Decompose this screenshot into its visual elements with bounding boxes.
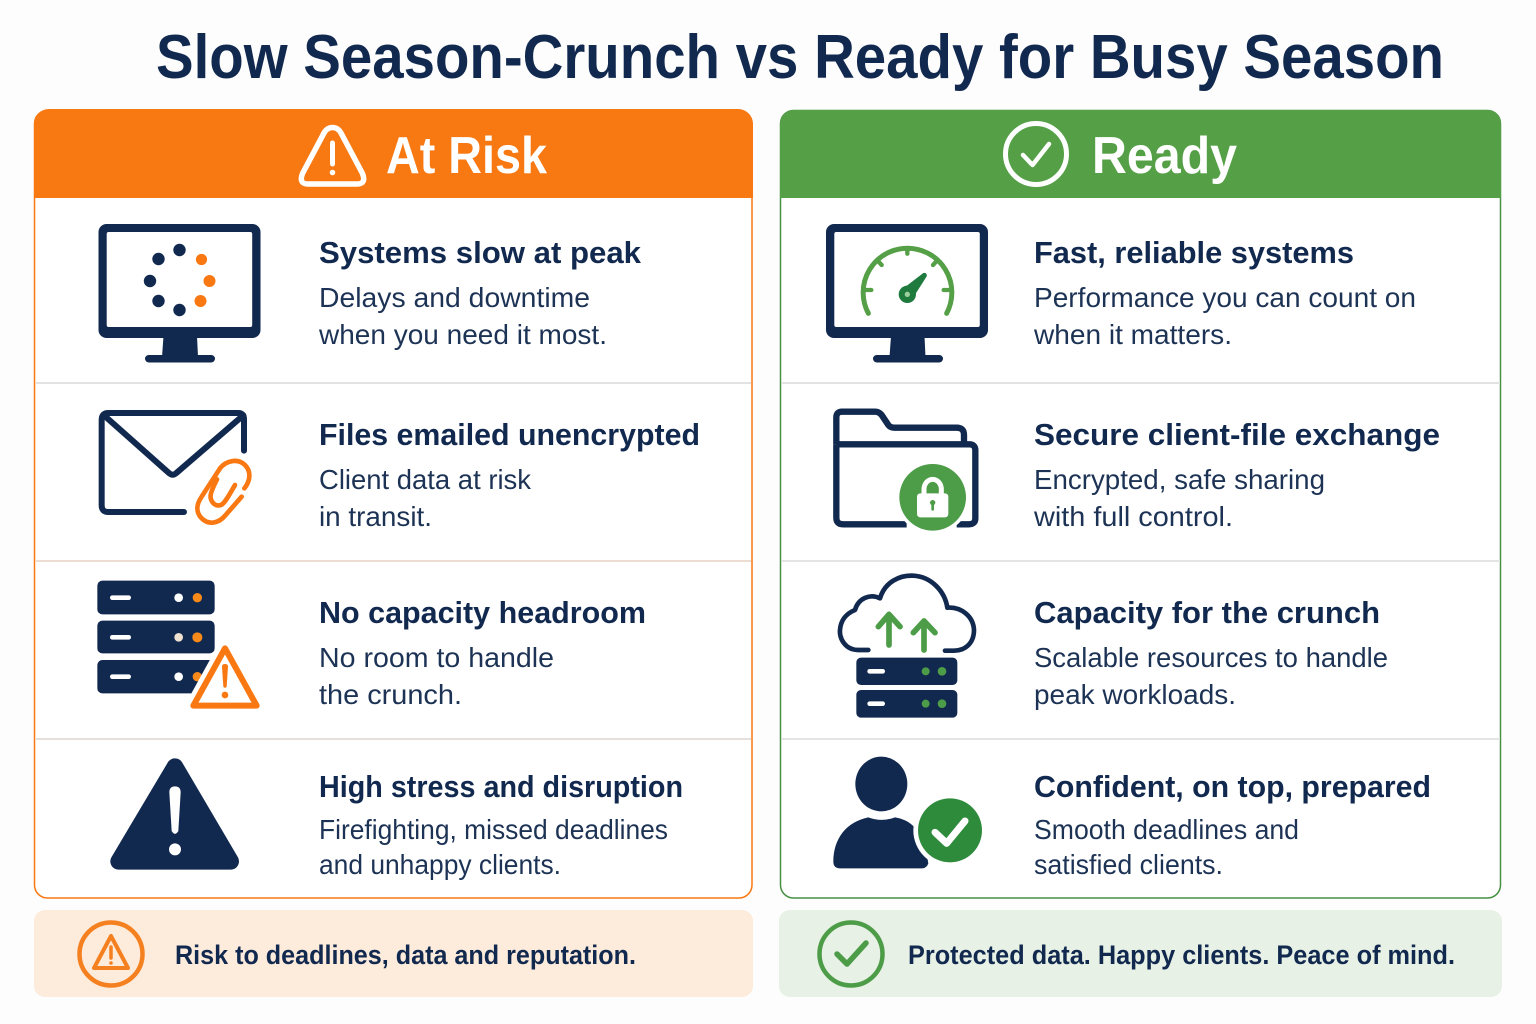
header: ready — [780, 110, 1501, 198]
text: fast reliable systems: Fast, reliable systems — [1034, 235, 1354, 270]
icon: servers with warning — [97, 581, 257, 706]
row: confident on top prepared — [833, 757, 1431, 880]
callout: ready — [779, 910, 1502, 997]
icon: envelope with paperclip — [102, 413, 249, 523]
row: no capacity headroom — [97, 581, 646, 710]
text: fast reliable systems: when it matters. — [1033, 319, 1232, 350]
row: files emailed unencrypted — [102, 413, 700, 532]
header label: Ready — [1092, 127, 1237, 185]
text: secure client-file exchange: Encrypted, safe sharing — [1034, 464, 1325, 495]
text: secure client-file exchange: Secure client-file exchange — [1034, 417, 1440, 452]
text: capacity for the crunch — [1034, 595, 1388, 710]
text: fast reliable systems: Performance you can count on — [1034, 282, 1416, 313]
icon: solid warning triangle — [119, 767, 231, 861]
text: systems slow at peak: when you need it most. — [318, 319, 607, 350]
text: no capacity headroom: No capacity headroom — [319, 595, 646, 630]
title: Slow Season-Crunch vs Ready for Busy Season — [156, 23, 1444, 92]
text: no capacity headroom — [319, 595, 646, 710]
text: systems slow at peak — [318, 235, 642, 350]
panel: at risk — [34, 109, 753, 898]
header label: At Risk — [386, 127, 547, 185]
icon: monitor with spinner — [98, 224, 260, 362]
text: capacity for the crunch: Scalable resources to handle — [1034, 642, 1388, 673]
text: high stress and disruption: High stress and disruption — [319, 769, 683, 804]
row: high stress and disruption — [119, 767, 683, 880]
icon: warning in circle — [80, 922, 142, 986]
text: no capacity headroom: the crunch. — [319, 679, 462, 710]
icon: monitor with gauge — [826, 224, 988, 362]
text: high stress and disruption: and unhappy clients. — [319, 849, 561, 880]
row: capacity for the crunch — [840, 576, 1388, 718]
callout text: Risk to deadlines, data and reputation. — [175, 940, 636, 970]
text: secure client-file exchange: with full control. — [1033, 501, 1233, 532]
row: fast reliable systems — [826, 224, 1416, 362]
text: capacity for the crunch: Capacity for the crunch — [1034, 595, 1380, 630]
callout text: Protected data. Happy clients. Peace of mind. — [908, 940, 1455, 970]
panel: ready — [780, 110, 1501, 898]
text: files emailed unencrypted: Client data at risk — [319, 464, 532, 495]
row: systems slow at peak — [98, 224, 642, 362]
text: systems slow at peak: Delays and downtime — [319, 282, 590, 313]
icon: check circle — [1006, 124, 1066, 184]
text: secure client-file exchange — [1033, 417, 1440, 532]
text: no capacity headroom: No room to handle — [319, 642, 554, 673]
icon: check in circle — [820, 922, 882, 986]
text: files emailed unencrypted: in transit. — [319, 501, 432, 532]
text: capacity for the crunch: peak workloads. — [1034, 679, 1236, 710]
icon: person with check — [833, 757, 987, 868]
row: secure client-file exchange — [836, 412, 1440, 534]
text: confident on top prepared: Smooth deadlines and — [1034, 814, 1299, 845]
text: files emailed unencrypted — [319, 417, 700, 532]
icon: cloud with servers — [840, 576, 974, 718]
text: confident on top prepared — [1034, 769, 1431, 880]
text: high stress and disruption: Firefighting, missed deadlines — [319, 814, 668, 845]
header: at risk — [34, 109, 753, 198]
callout: risk — [34, 910, 753, 997]
text: confident on top prepared: satisfied clients. — [1034, 849, 1223, 880]
text: high stress and disruption — [319, 769, 683, 880]
text: systems slow at peak: Systems slow at peak — [319, 235, 642, 270]
icon: warning triangle — [301, 128, 364, 184]
icon: folder with lock — [836, 412, 975, 534]
text: confident on top prepared: Confident, on top, prepared — [1034, 769, 1431, 804]
text: files emailed unencrypted: Files emailed unencrypted — [319, 417, 700, 452]
text: fast reliable systems — [1033, 235, 1416, 350]
